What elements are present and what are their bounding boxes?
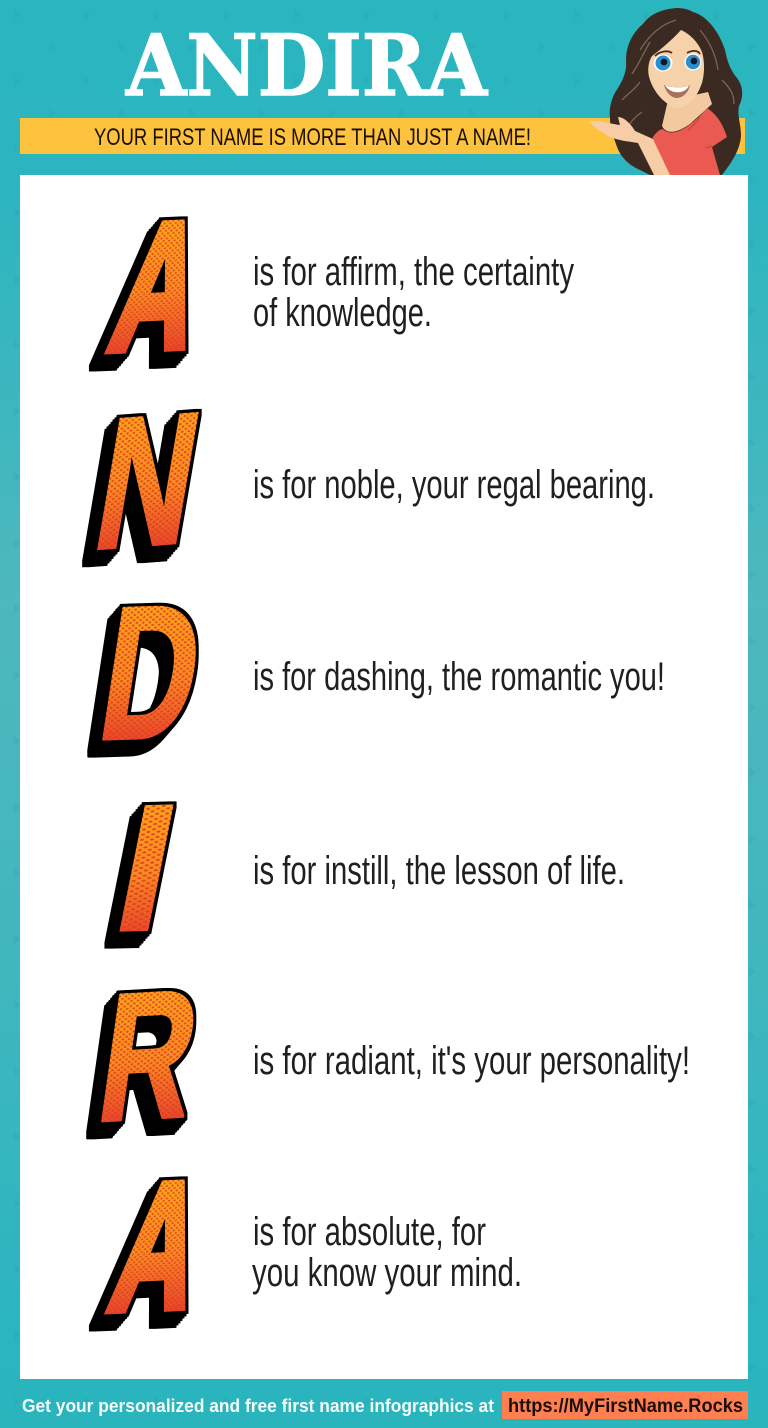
- footer url badge: https://MyFirstName.Rocks: [508, 1396, 743, 1417]
- text: A line: of knowledge.: [253, 291, 432, 335]
- letter A (second): A: [98, 1145, 220, 1349]
- shirt: [653, 108, 727, 175]
- illustration: cartoon woman: [590, 8, 742, 175]
- text: A line: is for affirm, the certainty: [253, 250, 574, 294]
- text: A line: [253, 250, 574, 335]
- footer promo text: Get your personalized and free first name infographics at: [22, 1396, 494, 1416]
- left eye: [654, 54, 672, 72]
- right eye: [684, 54, 702, 70]
- white content panel: [20, 175, 748, 1379]
- face: [648, 30, 704, 108]
- letter A: A: [98, 185, 220, 389]
- tagline banner: [20, 118, 745, 154]
- arm and hand: [590, 117, 670, 175]
- text: last A line: [252, 1210, 522, 1295]
- title: ANDIRA: [125, 16, 489, 115]
- letter N: N: [83, 374, 213, 589]
- tagline banner: YOUR FIRST NAME IS MORE THAN JUST A NAME!: [94, 124, 531, 151]
- letter R: R: [88, 952, 209, 1160]
- neck: [662, 92, 712, 132]
- eyebrows: [655, 51, 700, 56]
- letter I: I: [98, 765, 195, 972]
- text: last A line: is for absolute, for: [253, 1210, 486, 1254]
- text: last A line: you know your mind.: [252, 1251, 522, 1295]
- letter D: D: [89, 565, 214, 780]
- mouth: [664, 85, 690, 98]
- text: I line: is for instill, the lesson of life.: [253, 849, 625, 893]
- hair: [610, 8, 742, 175]
